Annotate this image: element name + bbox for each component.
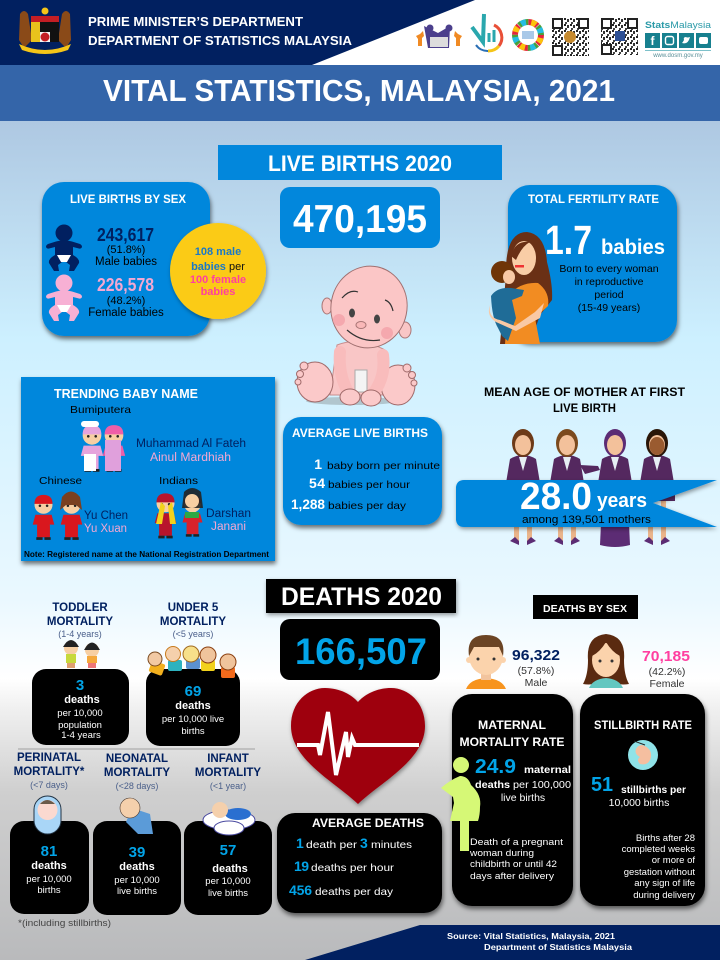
names: Bumiputera [136,438,246,464]
panel: average deaths: 456 [289,882,312,898]
panel: perinatal mortality: 81 [41,843,57,860]
footer source [305,925,720,960]
header band [0,0,720,65]
names: Chinese: Yu Chen [84,510,128,522]
female baby count: 226,578 [97,275,154,295]
panel: average deaths: 19 [294,858,309,874]
panel: toddler mortality: MORTALITY [47,616,113,628]
heading: mean age of mother: MEAN AGE OF MOTHER AT FIRST [484,385,686,399]
title band: VITAL STATISTICS, MALAYSIA, 2021 [103,73,615,108]
panel: average live births: baby born per minute [327,460,440,472]
icon: pregnant woman [441,757,480,851]
panel: neonatal mortality: (<28 days) [116,781,158,791]
department name: PRIME MINISTER’S DEPARTMENT [88,14,303,29]
panel: infant mortality: live births [208,888,248,899]
panel: trending baby name: Chinese [39,475,82,487]
panel: stillbirth rate: stillbirths per [621,784,686,796]
total deaths [280,619,440,680]
names: Bumiputera: Ainul Mardhiah [150,452,231,464]
StatsMalaysia social block [645,20,711,59]
panel: perinatal mortality: deaths [31,860,67,872]
names: Chinese [84,510,128,535]
panel: maternal mortality rate: MATERNAL [478,720,546,732]
panel: toddler mortality: population [58,720,102,731]
icon: baby on cloud [203,802,255,835]
panel: perinatal mortality: (<7 days) [30,780,68,790]
names: Indians: Darshan [206,508,251,520]
female baby count [88,275,164,319]
illustration: baby [295,259,417,406]
female baby count: Female babies [88,307,164,319]
department name: DEPARTMENT OF STATISTICS MALAYSIA [88,33,353,48]
panel: infant mortality: deaths [212,863,248,875]
StatsMalaysia social block: www.dosm.gov.my [652,53,703,59]
names: Indians [206,508,251,533]
icon: fetus [628,740,658,770]
panel: maternal mortality rate: maternal [524,764,571,776]
panel: average deaths: deaths per hour [311,862,395,874]
callout: sex ratio: babies per [191,261,245,273]
panel: neonatal mortality: NEONATAL [106,753,168,765]
panel: stillbirth rate: gestation without [624,867,695,878]
male baby count: 243,617 [97,225,154,245]
panel: under 5 mortality: 69 [185,683,201,700]
panel: under 5 mortality: deaths [175,700,211,712]
panel: under 5 mortality: UNDER 5 [168,602,219,614]
panel: maternal mortality rate: MORTALITY RATE [460,737,565,749]
footer source: Source: Vital Statistics, Malaysia, 2021 [447,931,615,941]
panel: total fertility rate [489,185,677,344]
callout: sex ratio [170,223,266,319]
panel: infant mortality: per 10,000 [205,876,251,887]
panel: average live births: babies per day [328,500,407,512]
male deaths: (57.8%) [518,665,554,677]
callout: sex ratio: 100 female [190,274,246,286]
panel: perinatal mortality: births [37,885,61,896]
footnote: *(including stillbirths) [18,918,111,928]
illustration: four women [505,429,675,547]
panel: maternal mortality rate: live births [501,792,545,804]
female deaths: (42.2%) [649,666,685,678]
names: Chinese: Yu Xuan [84,523,127,535]
panel: infant mortality: 57 [220,842,236,859]
panel: toddler mortality: deaths [64,694,100,706]
female baby count: (48.2%) [107,295,145,307]
StatsMalaysia social block: f [650,34,656,48]
heading: deaths by sex: DEATHS BY SEX [543,603,627,615]
icon: swaddled baby [34,796,61,834]
panel: neonatal mortality [93,753,181,915]
male deaths: Male [525,677,548,689]
panel: stillbirth rate: or more of [652,855,695,866]
callout: sex ratio: 108 male [195,246,241,258]
heading: live births 2020 [218,145,502,180]
panel: total fertility rate: TOTAL FERTILITY RATE [528,194,659,206]
icon: national crest [19,8,71,54]
panel: average deaths: AVERAGE DEATHS [312,816,424,830]
panel: stillbirth rate: during delivery [633,890,695,901]
panel: toddler mortality [32,602,129,745]
panel: under 5 mortality: births [181,726,205,737]
panel: under 5 mortality: per 10,000 live [162,714,224,725]
female deaths: Female [649,678,685,690]
icon: female baby [46,274,82,321]
callout: sex ratio: babies [201,286,235,298]
panel: infant mortality [184,753,272,915]
panel: toddler mortality: 3 [76,677,84,694]
icon: QR code with Facebook [601,18,638,55]
panel: toddler mortality: (1-4 years) [58,629,102,639]
icon: QR code with crest [552,18,589,56]
panel: under 5 mortality: (<5 years) [173,629,213,639]
icon: male baby [46,224,82,271]
panel: average live births: babies per hour [328,479,411,491]
illustration: mother and child [489,232,552,344]
panel: total fertility rate: period [594,289,624,301]
panel: live births by sex [42,182,210,336]
panel: stillbirth rate: any sign of life [634,878,695,889]
heading: live births 2020: LIVE BIRTHS 2020 [268,151,452,176]
panel: stillbirth rate: STILLBIRTH RATE [594,720,692,732]
panel: average deaths [277,813,442,913]
panel: stillbirth rate [580,694,705,906]
panel: average deaths: deaths per day [315,886,394,898]
panel: neonatal mortality: 39 [129,844,145,861]
panel: infant mortality: INFANT [207,753,249,765]
total deaths: 166,507 [295,631,427,672]
panel: trending baby name: Bumiputera [70,404,131,416]
panel: maternal mortality rate: 24.9 [475,756,516,778]
panel: neonatal mortality: deaths [119,861,155,873]
panel: neonatal mortality: live births [117,886,157,897]
icon: SDG wheel [515,22,541,48]
panel: average deaths: death per [306,839,358,851]
ribbon: mean age value: years [597,490,647,512]
panel: under 5 mortality [146,602,240,746]
panel: trending baby name: Note: Registered name at the National Registration Department [24,550,269,559]
male deaths: 96,322 [512,647,560,664]
male baby count [95,225,157,268]
panel: perinatal mortality: per 10,000 [26,874,72,885]
panel: infant mortality: (<1 year) [210,781,246,791]
ribbon: mean age value: among 139,501 mothers [522,514,652,526]
panel: under 5 mortality: MORTALITY [160,616,226,628]
panel: infant mortality: MORTALITY [195,767,261,779]
panel: stillbirth rate: 51 [591,774,613,796]
illustration: Indian children [155,488,203,538]
ribbon: mean age value: 28.0 [520,476,592,518]
panel: live births by sex: LIVE BIRTHS BY SEX [70,194,186,206]
panel: average live births: 1 [314,456,322,472]
icon: wrapped baby [120,798,153,834]
title band [0,65,720,121]
panel: trending baby name: TRENDING BABY NAME [54,387,198,401]
panel: total fertility rate: (15-49 years) [578,302,640,314]
panel: average live births: 1,288 [291,496,325,512]
panel: total fertility rate: Born to every woman [559,263,659,275]
panel: stillbirth rate: completed weeks [622,844,695,855]
heading: deaths by sex [533,595,638,619]
total live births: 470,195 [293,198,427,241]
panel: average live births: AVERAGE LIVE BIRTHS [292,428,428,440]
male baby count: Male babies [95,256,157,268]
panel: toddler mortality: 1-4 years [61,730,101,741]
panel: average live births [283,417,442,525]
panel: perinatal mortality [10,752,89,914]
total live births [280,187,440,248]
panel: total fertility rate: babies [601,236,665,259]
footer source: Department of Statistics Malaysia [484,942,632,952]
illustration: five children [148,646,236,678]
icon: family logo [416,24,462,48]
panel: neonatal mortality: MORTALITY [104,767,170,779]
panel: stillbirth rate: Births after 28 [636,833,695,844]
icon: female face [583,634,629,688]
panel: maternal mortality rate: days after delivery [470,871,554,882]
panel: average deaths: minutes [371,839,412,851]
panel: maternal mortality rate: deaths per 100,000 [475,779,571,791]
StatsMalaysia social block: Stats Malaysia [645,20,711,30]
names: Bumiputera: Muhammad Al Fateh [136,438,246,450]
female deaths [642,648,690,690]
illustration: Chinese children [33,492,82,540]
heart with ECG line [291,688,425,804]
illustration: Bumiputera children [81,421,125,472]
panel: maternal mortality rate [441,694,573,906]
panel: trending baby name: Indians [159,475,198,487]
panel: maternal mortality rate: childbirth or until 42 [470,859,557,870]
icon: census swoosh logo [472,14,502,51]
panel: total fertility rate: in reproductive [575,276,644,288]
panel: perinatal mortality: MORTALITY* [14,766,85,778]
male baby count: (51.8%) [107,244,145,256]
ribbon: mean age value [456,476,717,527]
male deaths [512,647,560,689]
panel: toddler mortality: TODDLER [52,602,108,614]
panel: perinatal mortality: PERINATAL [17,752,81,764]
panel: average live births: 54 [309,475,325,491]
panel: toddler mortality: per 10,000 [57,708,103,719]
panel: average deaths: 3 [360,835,368,851]
heading: deaths 2020: DEATHS 2020 [281,583,442,611]
names: Indians: Janani [211,521,246,533]
panel: maternal mortality rate: Death of a pregnant [470,837,563,848]
panel: stillbirth rate: 10,000 births [609,797,669,809]
female deaths: 70,185 [642,648,690,665]
heading: mean age of mother: LIVE BIRTH [553,401,616,415]
panel: average deaths: 1 [296,835,304,851]
panel: neonatal mortality: per 10,000 [114,875,160,886]
department name [88,14,353,48]
heading: mean age of mother [484,385,686,415]
panel: total fertility rate: 1.7 [545,217,592,263]
panel: trending baby name [21,377,275,561]
icon: male face [466,635,506,689]
illustration: toddlers [63,640,100,668]
panel: maternal mortality rate: woman during [469,848,534,859]
